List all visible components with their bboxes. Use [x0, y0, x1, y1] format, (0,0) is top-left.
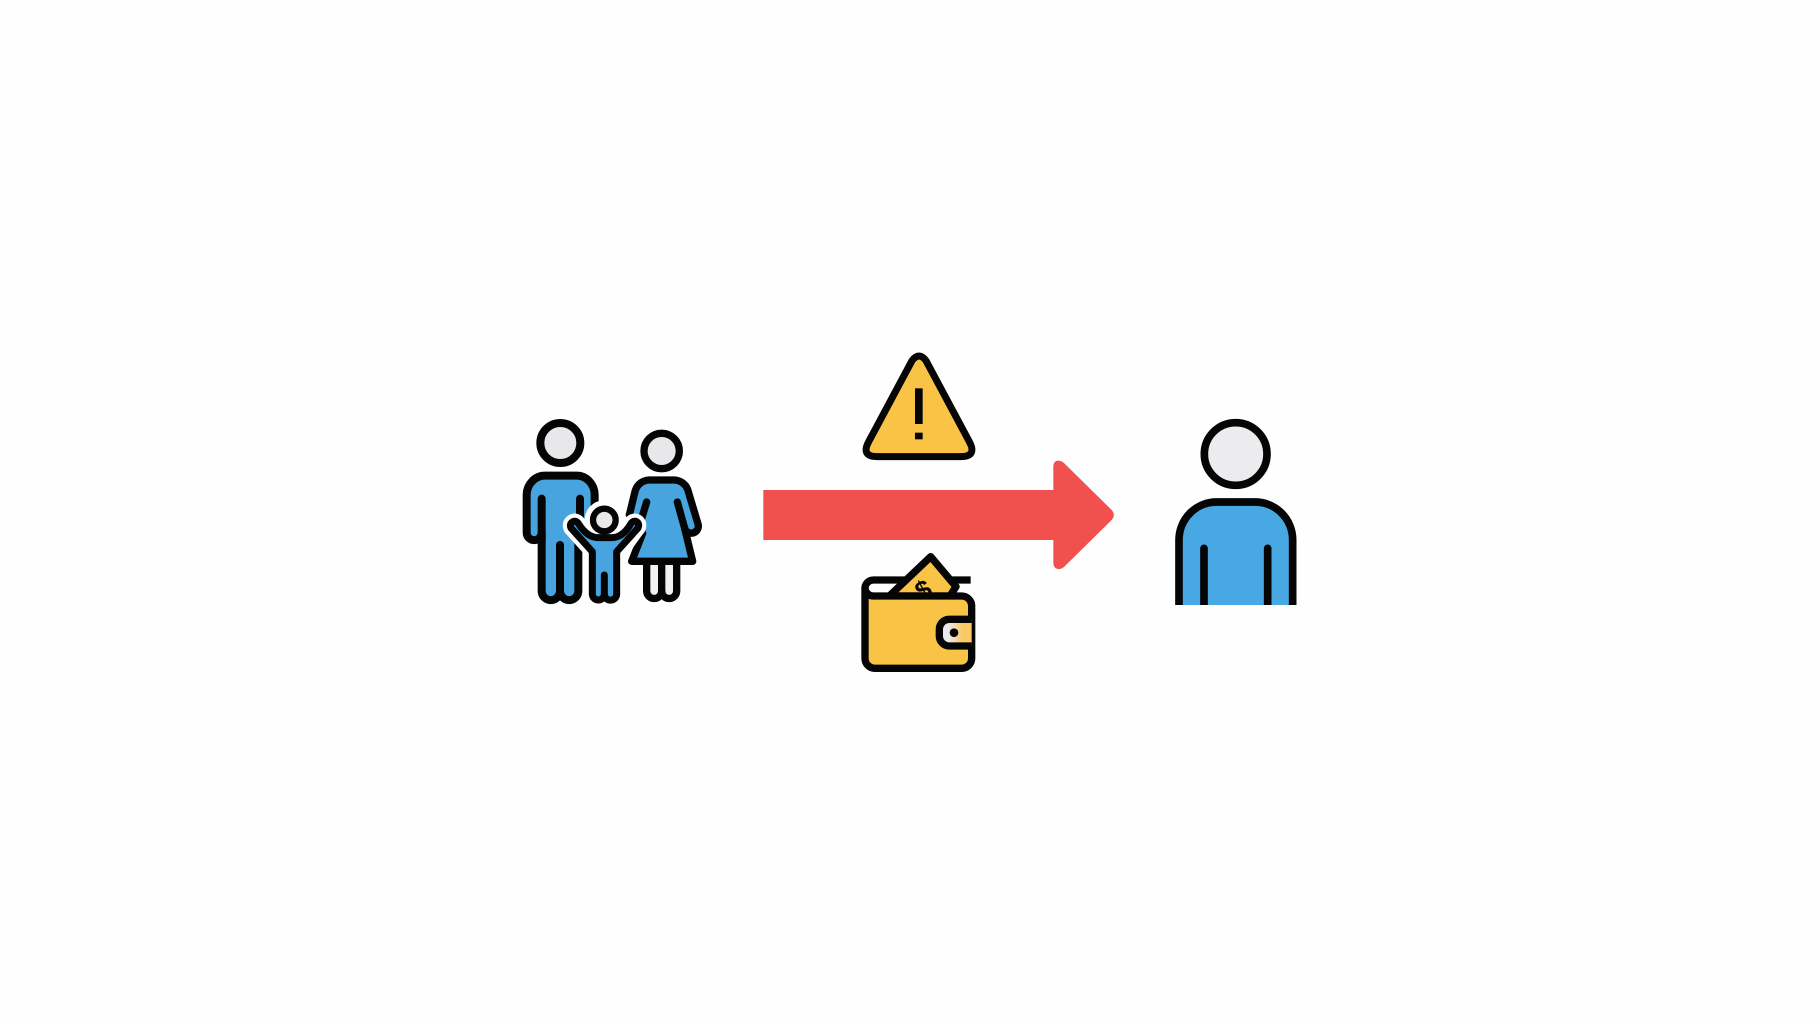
- banknote: $: [910, 573, 937, 606]
- child with white halo: [570, 509, 639, 600]
- woman: [629, 433, 698, 598]
- icon: wallet with banknote: [865, 557, 972, 668]
- wallet body: [865, 588, 972, 668]
- back flap: [865, 580, 971, 588]
- man: [527, 423, 595, 600]
- icon: warning triangle: [866, 356, 972, 457]
- icon: family of three: [527, 423, 698, 600]
- icon: single person: [1173, 423, 1300, 610]
- clasp: [939, 619, 972, 646]
- arrow: [763, 461, 1114, 569]
- exclamation mark: [915, 388, 923, 439]
